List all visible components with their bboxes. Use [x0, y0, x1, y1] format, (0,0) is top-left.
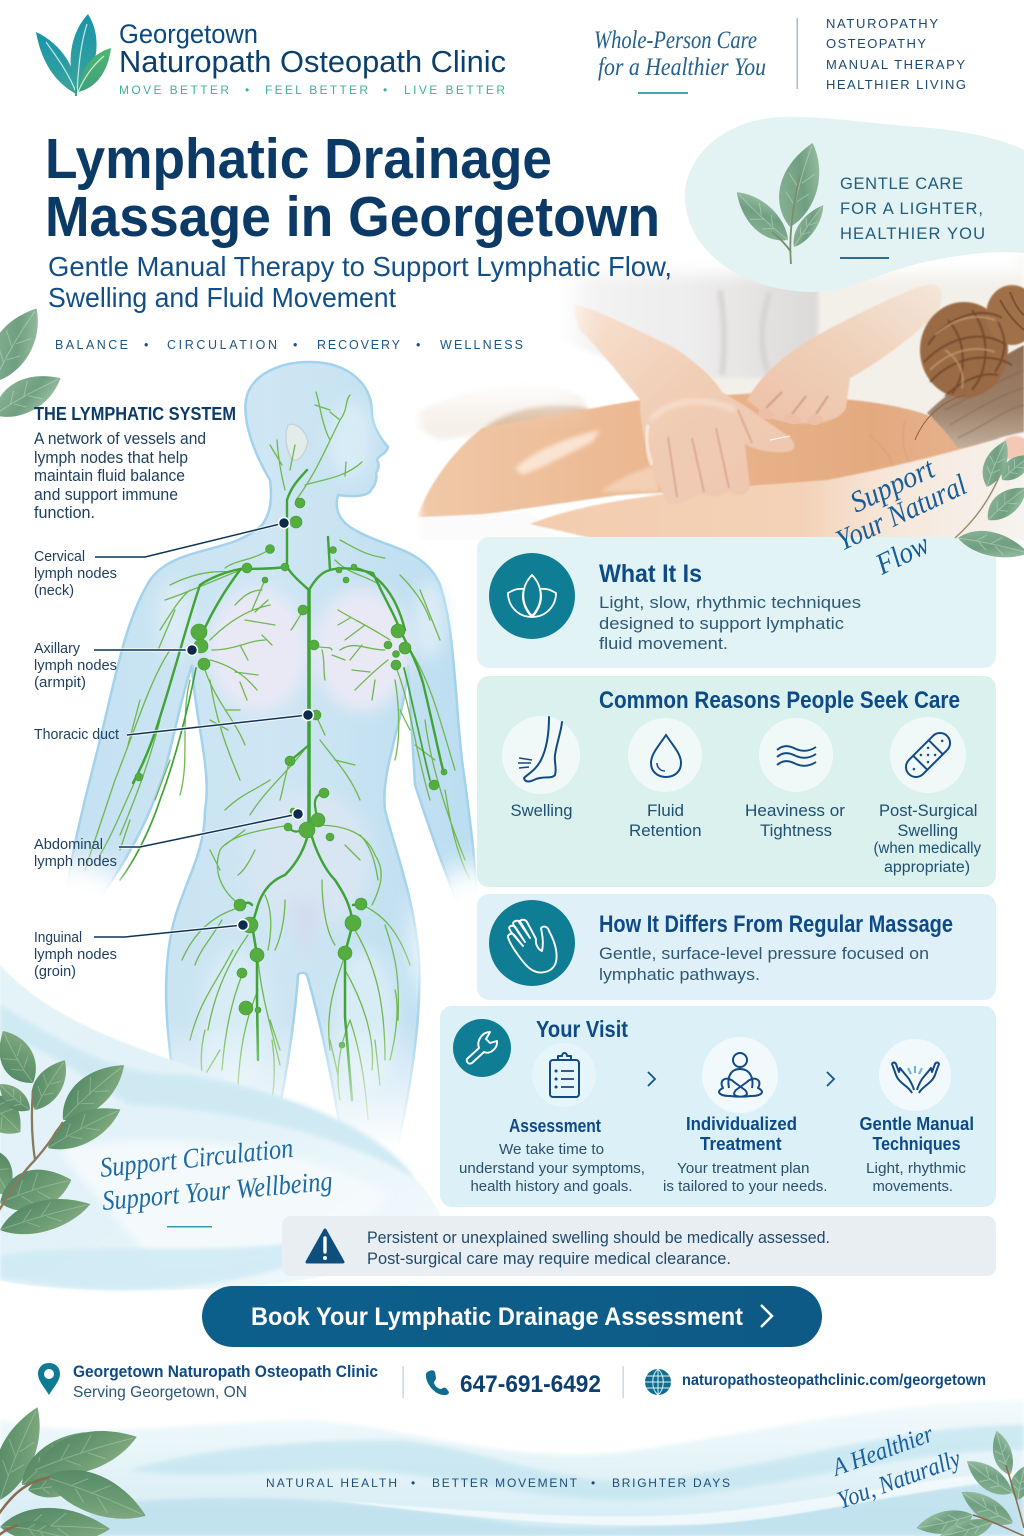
- background waves: footer: [0, 1400, 1024, 1536]
- keyword strip: RECOVERY: [317, 338, 401, 352]
- step: individualized treatment: Individualized: [686, 1114, 797, 1134]
- warning text: Post-surgical care may require medical clearance.: [367, 1250, 731, 1268]
- callout text: FOR A LIGHTER,: [840, 200, 983, 218]
- main title: Massage in Georgetown: [45, 185, 660, 249]
- item: fluid retention: Retention: [629, 821, 702, 840]
- panel body: [599, 944, 929, 984]
- callout: thoracic duct: Thoracic duct: [34, 726, 120, 743]
- header: logo: [36, 14, 506, 97]
- item: post-surgical swelling: (when medically: [874, 840, 981, 857]
- step: gentle manual techniques: movements.: [872, 1178, 953, 1195]
- callout text: HEALTHIER YOU: [840, 225, 985, 243]
- subtitle: Swelling and Fluid Movement: [48, 282, 396, 313]
- icon: wrench: [453, 1019, 511, 1077]
- panel body: [599, 593, 861, 653]
- logo tagline: LIVE BETTER: [404, 83, 505, 97]
- icon: map pin: [38, 1363, 60, 1395]
- contact: website: naturopathosteopathclinic.com/georgetown: [682, 1372, 986, 1389]
- decorative leaves: footer right: [914, 1429, 1024, 1536]
- item: heaviness: [745, 718, 845, 840]
- decorative leaf sprig: [955, 436, 1024, 563]
- icon: lotus: [489, 553, 575, 639]
- callout: axillary lymph nodes: (armpit): [34, 674, 86, 691]
- white sheet: [416, 513, 494, 523]
- callout: abdominal lymph nodes: Abdominal: [34, 836, 103, 853]
- icon: logo leaves: [36, 14, 111, 96]
- callout: inguinal lymph nodes: Inguinal: [34, 929, 82, 946]
- item: post-surgical swelling: Swelling: [898, 821, 958, 840]
- step: gentle manual techniques: Light, rhythmic: [866, 1160, 967, 1177]
- banner text: Flow: [870, 528, 935, 582]
- subtitle: Gentle Manual Therapy to Support Lymphatic Flow,: [48, 251, 672, 282]
- step: assessment: [459, 1043, 645, 1195]
- banner text: [831, 452, 972, 582]
- logo name: Georgetown: [119, 19, 258, 49]
- main title: Lymphatic Drainage: [45, 127, 552, 191]
- logo name: Naturopath Osteopath Clinic: [119, 44, 506, 79]
- keyword strip: •: [144, 338, 148, 352]
- arrow: [827, 1072, 834, 1086]
- script slogan: support circulation: Support Circulation: [98, 1133, 295, 1184]
- callout: axillary lymph nodes: [34, 640, 198, 691]
- header: script tagline: Whole-Person Care: [594, 27, 757, 54]
- arrow: [648, 1072, 655, 1086]
- footer tagline: BETTER MOVEMENT: [432, 1476, 578, 1490]
- massage photo illustration: [400, 250, 1024, 540]
- lymph nodes: [135, 498, 447, 1048]
- item: fluid retention: Fluid: [647, 801, 684, 820]
- callout: cervical lymph nodes: lymph nodes: [34, 565, 117, 582]
- callout: inguinal lymph nodes: lymph nodes: [34, 946, 117, 963]
- step: gentle manual techniques: Techniques: [872, 1134, 960, 1154]
- footer tagline: NATURAL HEALTH: [266, 1476, 397, 1490]
- contact: clinic location: Serving Georgetown, ON: [73, 1384, 247, 1401]
- step: gentle manual techniques: [860, 1039, 974, 1195]
- header: services list: HEALTHIER LIVING: [826, 77, 966, 92]
- header: services list: MANUAL THERAPY: [826, 57, 965, 72]
- decorative leaves: upper left: [0, 298, 68, 428]
- callout: inguinal lymph nodes: (groin): [34, 963, 76, 980]
- contact: phone: 647-691-6492: [460, 1371, 601, 1398]
- client back: [415, 393, 1024, 522]
- item: fluid retention: [628, 718, 702, 840]
- keyword strip: BALANCE: [55, 338, 128, 352]
- callout: axillary lymph nodes: lymph nodes: [34, 657, 117, 674]
- footer tagline: [266, 1476, 730, 1490]
- script slogan: support circulation: [98, 1133, 334, 1228]
- item: swelling: Swelling: [510, 801, 572, 820]
- background wave: lower left: [0, 965, 440, 1290]
- step: assessment: Assessment: [509, 1116, 601, 1136]
- footer tagline: BRIGHTER DAYS: [612, 1476, 730, 1490]
- body shading: [157, 400, 445, 1090]
- body silhouette: [60, 362, 478, 1160]
- item: heaviness: Tightness: [760, 821, 832, 840]
- item: post-surgical swelling: Post-Surgical: [879, 801, 978, 820]
- blob: gentle care callout: [685, 117, 1024, 292]
- callout: cervical lymph nodes: (neck): [34, 582, 74, 599]
- therapist left arm and hand: [573, 304, 794, 504]
- lymphatic system intro: maintain fluid balance: [34, 467, 185, 485]
- header: services list: NATUROPATHY: [826, 16, 938, 31]
- header: script tagline: for a Healthier You: [598, 54, 766, 81]
- item: post-surgical swelling: appropriate): [884, 859, 970, 876]
- script banner: support your natural flow: [831, 436, 1024, 582]
- item: swelling: [502, 716, 580, 820]
- header: services list: [796, 16, 966, 92]
- icon: globe: [645, 1369, 671, 1395]
- contact: clinic location: Georgetown Naturopath Osteopath Clinic: [73, 1363, 378, 1381]
- panel: what it is: [477, 537, 996, 668]
- thin lymph branches: [85, 392, 470, 1120]
- callout: axillary lymph nodes: Axillary: [34, 640, 80, 657]
- header: script tagline: [594, 27, 766, 94]
- footer tagline: •: [591, 1476, 595, 1490]
- item: heaviness: Heaviness or: [745, 801, 845, 820]
- icon: phone: [426, 1370, 449, 1395]
- panel: how it differs: [477, 894, 996, 1000]
- call-to-action button: Book Your Lymphatic Drainage Assessment: [251, 1303, 744, 1331]
- step: individualized treatment: Treatment: [700, 1134, 782, 1154]
- lymphatic system intro: THE LYMPHATIC SYSTEM: [34, 404, 236, 424]
- logo tagline: MOVE BETTER: [119, 83, 229, 97]
- callout: abdominal lymph nodes: [34, 808, 304, 870]
- logo tagline: •: [245, 83, 249, 97]
- lymphatic system intro: lymph nodes that help: [34, 449, 188, 467]
- keyword strip: •: [293, 338, 297, 352]
- icon: warning triangle: [307, 1230, 343, 1262]
- callout: thoracic duct: [34, 710, 314, 743]
- panel body: Light, slow, rhythmic techniques: [599, 593, 861, 612]
- callout: medical warning: [282, 1216, 996, 1276]
- human body lymphatic illustration: [60, 362, 478, 1160]
- lymphatic system intro: and support immune: [34, 486, 178, 504]
- warning text: Persistent or unexplained swelling should be medically assessed.: [367, 1229, 830, 1247]
- step: assessment: understand your symptoms,: [459, 1160, 645, 1177]
- icon: leaf sprig: [727, 138, 829, 264]
- step: individualized treatment: Your treatment plan: [677, 1160, 810, 1177]
- step: assessment: health history and goals.: [470, 1178, 632, 1195]
- step: gentle manual techniques: Gentle Manual: [860, 1114, 974, 1134]
- panel body: lymphatic pathways.: [599, 965, 760, 984]
- callout: cervical lymph nodes: [34, 518, 290, 599]
- lymphatic system intro: A network of vessels and: [34, 430, 206, 448]
- contact: clinic location: [38, 1363, 378, 1401]
- panel heading: What It Is: [599, 560, 702, 588]
- main lymph vessels: [120, 470, 443, 1100]
- icon: hand: [489, 900, 575, 986]
- panel heading: How It Differs From Regular Massage: [599, 911, 953, 938]
- lymphatic system intro: [34, 404, 236, 522]
- footer script slogan: [827, 1420, 965, 1515]
- decorative leaf branch: lower left: [0, 1024, 134, 1243]
- main title: [45, 127, 660, 249]
- logo name: [119, 19, 506, 79]
- item: post-surgical swelling: [874, 717, 981, 876]
- panel body: Gentle, surface-level pressure focused on: [599, 944, 929, 963]
- panel body: fluid movement.: [599, 634, 728, 653]
- callout text: [840, 175, 985, 259]
- keyword strip: CIRCULATION: [167, 338, 277, 352]
- client arm and banner: [530, 436, 1024, 540]
- header: services list: OSTEOPATHY: [826, 36, 926, 51]
- logo tagline: •: [383, 83, 387, 97]
- callout text: GENTLE CARE: [840, 175, 963, 193]
- therapist shirt: [583, 274, 818, 378]
- panel: your visit: [440, 1006, 996, 1207]
- callout: inguinal lymph nodes: [34, 920, 248, 980]
- keyword strip: [55, 338, 523, 352]
- callout: cervical lymph nodes: Cervical: [34, 548, 85, 565]
- warning text: [367, 1229, 830, 1268]
- therapist right arm: [747, 284, 942, 424]
- call-to-action button: [202, 1286, 822, 1347]
- towel: [419, 392, 587, 440]
- subtitle: [48, 251, 672, 313]
- footer script slogan: A Healthier: [827, 1420, 937, 1482]
- ear: [286, 424, 308, 460]
- decorative leaves: footer left: [0, 1400, 153, 1536]
- lymphatic system intro: function.: [34, 504, 95, 522]
- keyword strip: •: [416, 338, 420, 352]
- footer tagline: •: [411, 1476, 415, 1490]
- step: individualized treatment: is tailored to your needs.: [663, 1178, 828, 1195]
- logo tagline: FEEL BETTER: [265, 83, 368, 97]
- footer script slogan: You, Naturally: [834, 1445, 965, 1515]
- callout: abdominal lymph nodes: lymph nodes: [34, 853, 117, 870]
- step: assessment: We take time to: [499, 1141, 604, 1158]
- panel body: designed to support lymphatic: [599, 614, 845, 633]
- panel: common reasons: [477, 676, 996, 887]
- panel heading: Common Reasons People Seek Care: [599, 687, 960, 714]
- step: individualized treatment: [663, 1037, 828, 1195]
- keyword strip: WELLNESS: [440, 338, 523, 352]
- hair: [927, 345, 1024, 448]
- logo tagline: [119, 83, 505, 97]
- banner text: Support: [845, 452, 940, 519]
- panel heading: Your Visit: [536, 1016, 628, 1042]
- contact: website: [645, 1369, 986, 1395]
- script slogan: support circulation: Support Your Wellbeing: [101, 1166, 334, 1217]
- banner text: Your Natural: [831, 468, 972, 557]
